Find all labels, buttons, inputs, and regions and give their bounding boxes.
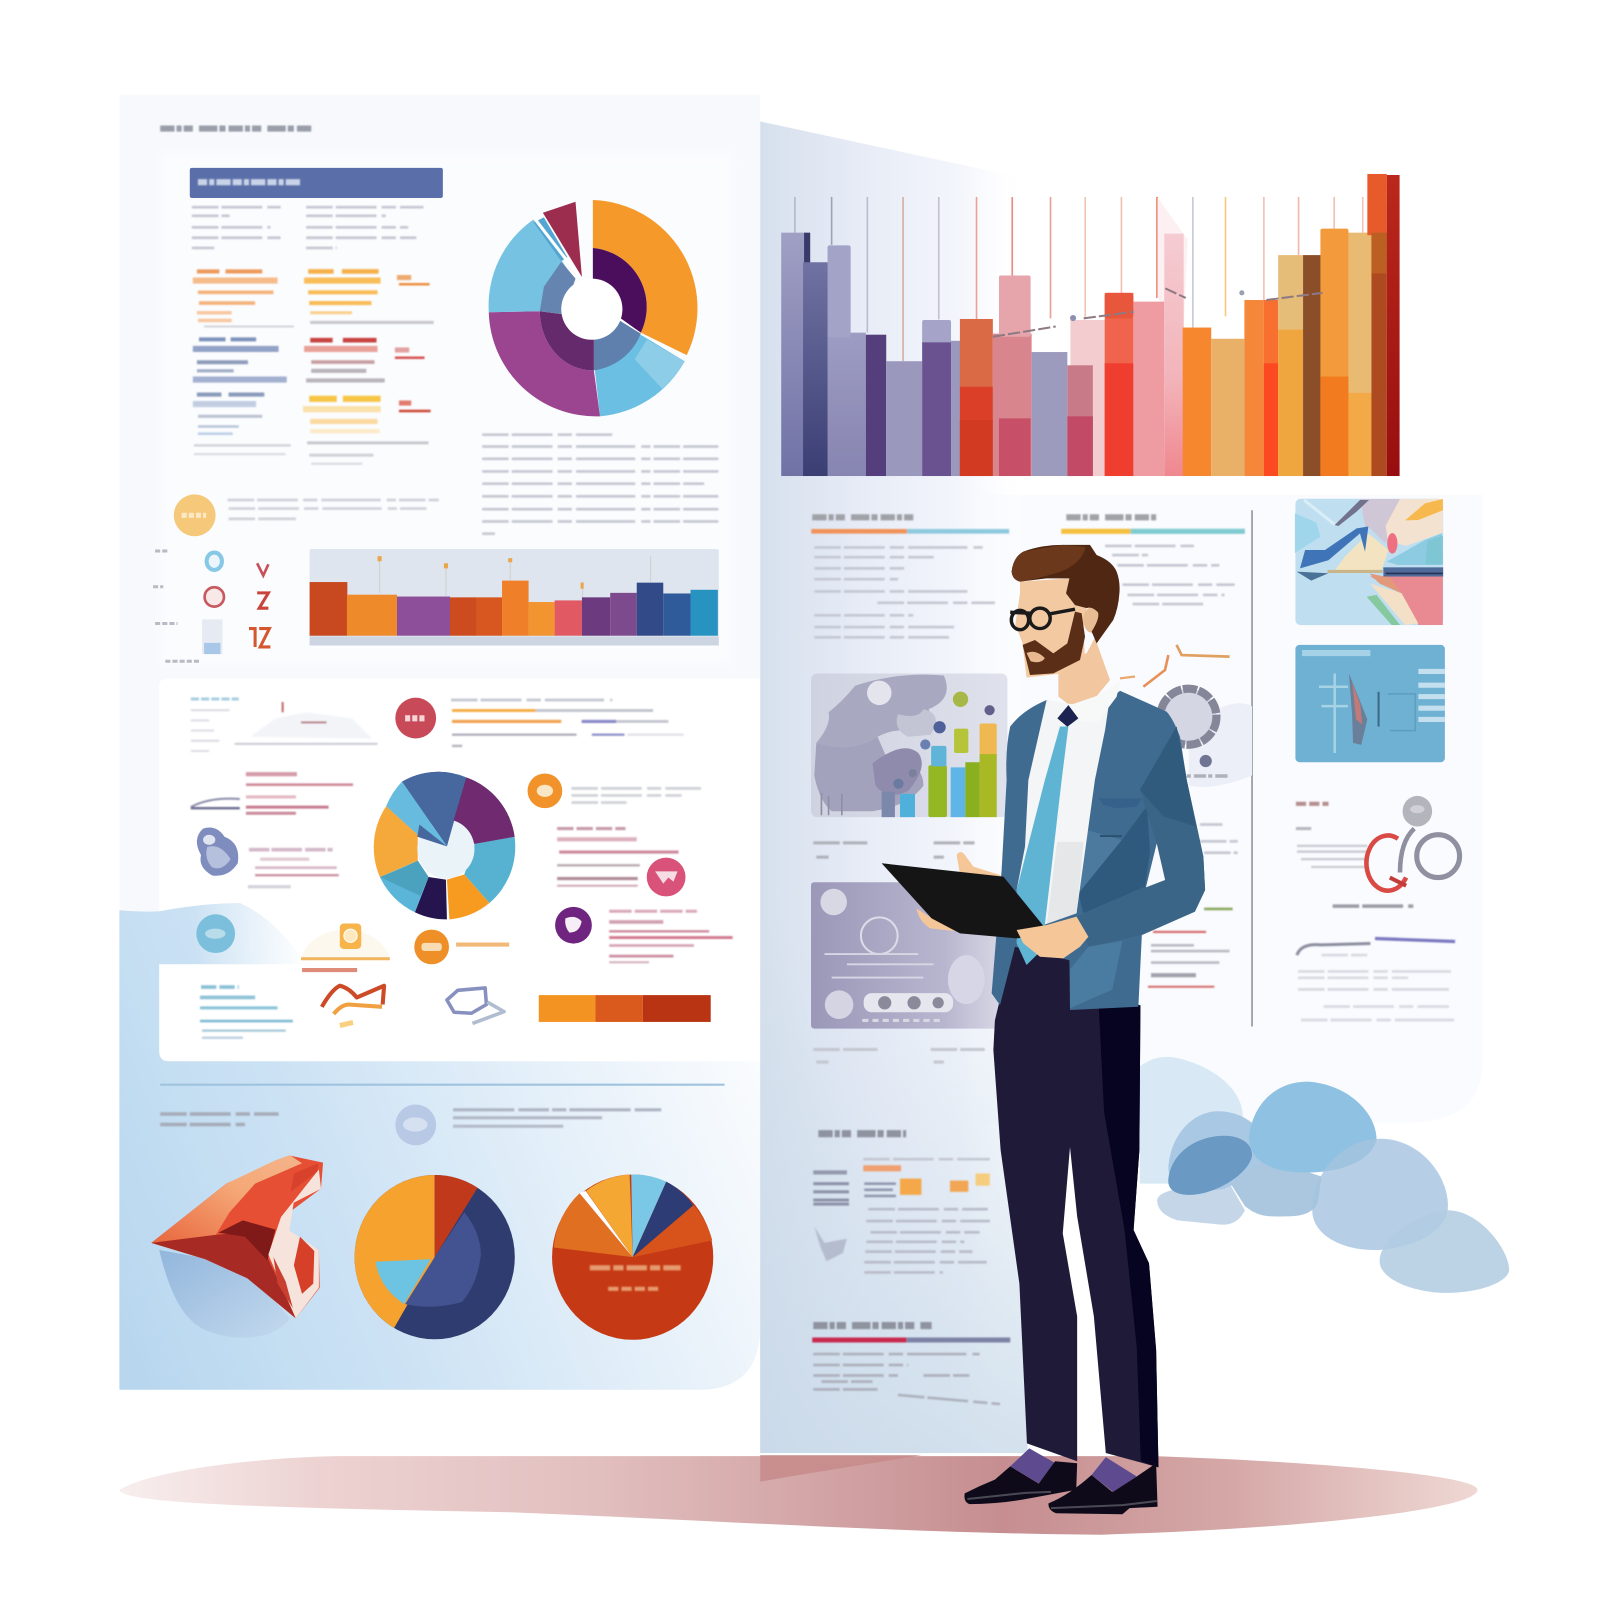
illustration: grey map with bars xyxy=(811,673,1007,817)
list: yellow column xyxy=(304,271,434,322)
trousers xyxy=(993,944,1158,1467)
icons: small indicators xyxy=(153,551,270,661)
segmented bar xyxy=(539,995,711,1022)
icon: purple badge xyxy=(555,907,592,944)
hand back xyxy=(957,852,1004,880)
shirt xyxy=(1017,700,1109,924)
arm gap xyxy=(1146,843,1165,887)
text block: pink notes left xyxy=(191,774,353,813)
collar xyxy=(1065,682,1120,723)
text block: pie caption xyxy=(482,435,718,534)
icon: orange badge xyxy=(174,494,216,536)
icon: linked rings xyxy=(1366,796,1460,891)
label: rings caption xyxy=(1333,904,1413,908)
text block: first column right report xyxy=(811,517,1009,637)
face xyxy=(1015,578,1087,678)
chart: navy orange pie xyxy=(355,1175,515,1339)
text block: blue note xyxy=(200,987,293,1038)
tie xyxy=(1017,727,1068,965)
hair xyxy=(1012,545,1120,643)
icon: squiggle chart xyxy=(322,986,384,1026)
tie knot xyxy=(1057,705,1078,727)
icon: red badge xyxy=(395,698,436,738)
icon: orange badge right xyxy=(528,773,562,808)
hair highlight xyxy=(1012,545,1086,582)
text block: lower report block xyxy=(813,1134,990,1272)
list: red column xyxy=(304,340,424,380)
icon: camera card xyxy=(301,923,390,970)
chart: middle donut pie xyxy=(374,772,515,919)
illustration: blue clouds xyxy=(1140,1057,1509,1293)
beard xyxy=(1023,612,1085,675)
illustration: abstract map xyxy=(1295,499,1443,625)
text block: pink notes lower xyxy=(248,850,339,887)
floor shadow xyxy=(119,1456,1478,1535)
left sock xyxy=(1010,1448,1056,1483)
caption: dashboard xyxy=(813,1049,985,1062)
trousers shading xyxy=(1099,1005,1158,1467)
chart: large donut pie xyxy=(489,200,697,416)
sleeve xyxy=(1077,727,1205,947)
person: analyst xyxy=(882,545,1205,1514)
header banner xyxy=(190,168,443,198)
text block: purple note xyxy=(1297,938,1455,1020)
icon: pink badge xyxy=(647,858,686,896)
text block: second column right report xyxy=(1061,517,1245,604)
column divider xyxy=(1251,510,1253,1027)
ear xyxy=(1083,607,1100,633)
jacket lower panel xyxy=(1070,941,1122,1008)
chart: small bar chart xyxy=(310,549,719,646)
text block: lower note xyxy=(453,1110,661,1126)
hand lower xyxy=(917,908,960,932)
pocket line xyxy=(1100,835,1122,837)
left shoe xyxy=(964,1461,1077,1504)
text block: ring note xyxy=(1296,804,1367,867)
text block: behind arm xyxy=(1148,824,1238,987)
sketch: faint ship lines xyxy=(191,699,378,751)
text block: progress lines xyxy=(451,700,684,746)
icon: periwinkle badge xyxy=(395,1104,436,1145)
icon: lilac blob xyxy=(197,828,238,876)
list: blue column xyxy=(193,339,291,454)
text block: lower heading xyxy=(160,1114,279,1124)
illustration: grey dashboard xyxy=(811,882,1002,1029)
text block: grey note xyxy=(571,788,701,803)
right shoe xyxy=(1048,1463,1158,1514)
text block: badge note xyxy=(228,500,439,519)
shirt shade xyxy=(1047,842,1084,923)
jacket dark side xyxy=(1078,806,1150,913)
list: orange column xyxy=(193,271,294,327)
right sock xyxy=(1092,1457,1137,1492)
neck xyxy=(1058,638,1110,714)
illustration: blue map panel xyxy=(1295,645,1445,762)
icon: blue badge xyxy=(196,914,235,953)
jacket body xyxy=(992,691,1205,1010)
illustration: gear and squiggle xyxy=(1120,645,1252,787)
text block: pink notes bottom xyxy=(609,911,733,962)
jacket light wedge xyxy=(1078,830,1122,893)
heading: left report xyxy=(160,126,311,132)
hand right xyxy=(1017,917,1088,958)
chart gridlines xyxy=(795,197,1363,361)
panel: right report background xyxy=(760,121,1483,1453)
list: pale yellow column xyxy=(303,399,431,464)
text block: intro columns xyxy=(192,207,423,248)
text block: report footer xyxy=(812,1326,1010,1404)
sleeve shade xyxy=(1140,727,1196,827)
floor wedge xyxy=(760,1455,921,1482)
icon: orange label badge xyxy=(414,930,509,964)
glasses xyxy=(1010,608,1075,630)
chart: orange pie xyxy=(552,1174,713,1340)
pocket xyxy=(1098,798,1142,808)
icon: lilac arrow xyxy=(447,988,504,1023)
panel: left report background xyxy=(119,95,760,1390)
lip xyxy=(1027,652,1045,662)
tablet xyxy=(882,863,1050,938)
caption: map xyxy=(813,843,974,857)
illustration: red rock xyxy=(151,1155,323,1338)
chart: tall bar chart xyxy=(781,174,1400,476)
text block: pink notes right xyxy=(557,829,679,886)
